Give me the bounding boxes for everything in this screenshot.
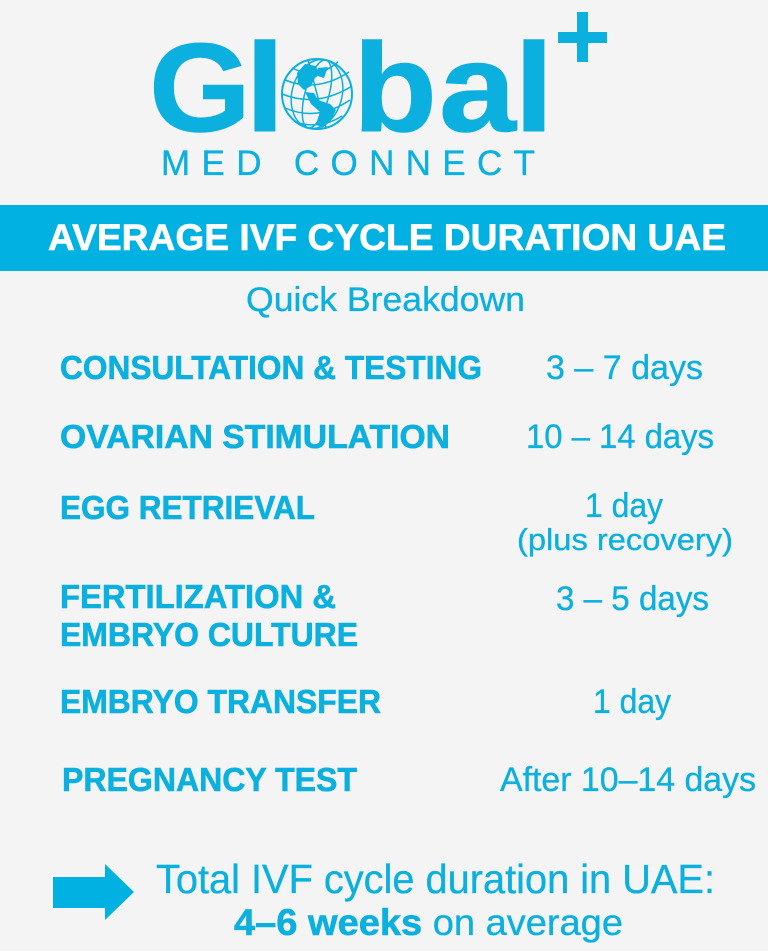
row: consultation and testing <box>60 349 703 387</box>
icon: plus sign <box>558 12 607 62</box>
row: ovarian stimulation: OVARIAN STIMULATION <box>60 418 450 455</box>
row: pregnancy test: PREGNANCY TEST <box>62 761 357 798</box>
row: fertilization and embryo culture: 3 – 5 days <box>556 580 709 618</box>
total duration callout: Total IVF cycle duration in UAE: <box>156 856 715 902</box>
icon: arrow <box>53 864 134 920</box>
row: egg retrieval <box>60 487 733 557</box>
row: ovarian stimulation <box>60 418 714 456</box>
title banner: AVERAGE IVF CYCLE DURATION UAE <box>48 217 726 258</box>
row: pregnancy test: After 10–14 days <box>500 761 756 799</box>
row: consultation and testing: CONSULTATION & TESTING <box>60 349 482 386</box>
row: egg retrieval: (plus recovery) <box>517 522 733 557</box>
row: egg retrieval: 1 day <box>585 487 663 525</box>
row: pregnancy test <box>62 761 756 799</box>
logo: Global Med Connect: a <box>439 17 517 158</box>
logo: Global Med Connect: b <box>353 17 437 158</box>
logo: Global Med Connect: l <box>245 17 285 158</box>
row: consultation and testing: 3 – 7 days <box>546 349 703 387</box>
logo: Global Med Connect <box>149 12 607 183</box>
row: fertilization and embryo culture: EMBRYO CULTURE <box>60 616 358 653</box>
row: embryo transfer: 1 day <box>593 683 671 721</box>
logo: Global Med Connect: G <box>149 17 251 158</box>
logo: Global Med Connect: l <box>514 17 554 158</box>
total duration callout <box>156 856 715 943</box>
row: fertilization and embryo culture: FERTILIZATION & <box>60 578 336 615</box>
total duration callout: 4–6 weeks on average <box>234 902 623 943</box>
subheading: Quick Breakdown <box>246 281 525 319</box>
row: fertilization and embryo culture <box>60 578 709 653</box>
row: ovarian stimulation: 10 – 14 days <box>526 418 714 456</box>
logo: Global Med Connect: MED CONNECT <box>161 144 535 183</box>
icon: globe <box>282 54 352 134</box>
row: egg retrieval: EGG RETRIEVAL <box>60 489 315 526</box>
title banner <box>0 205 768 271</box>
row: embryo transfer: EMBRYO TRANSFER <box>60 683 381 720</box>
row: embryo transfer <box>60 683 671 721</box>
